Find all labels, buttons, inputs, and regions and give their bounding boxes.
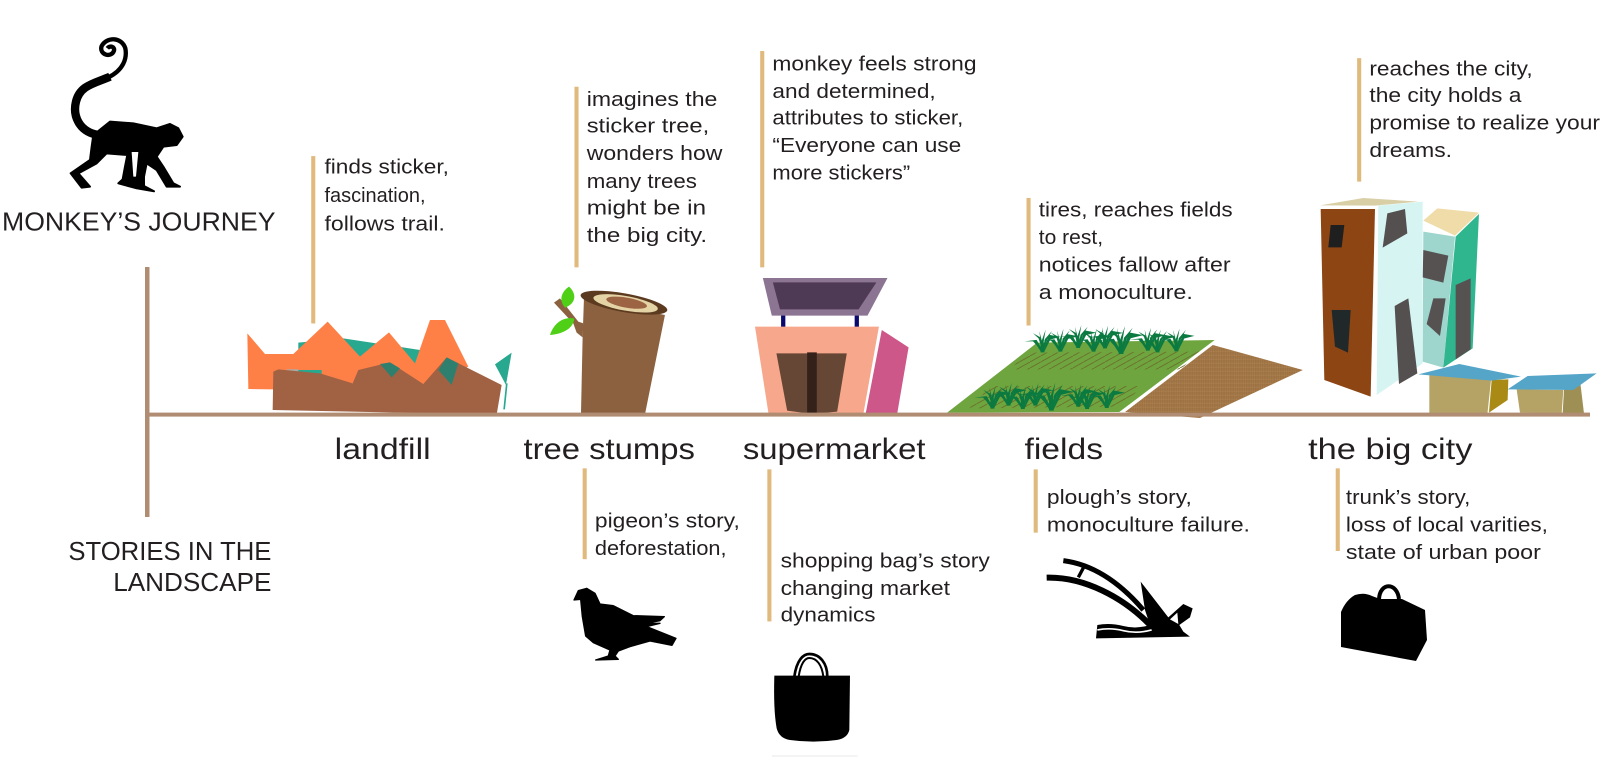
note: finds sticker: fascination, [324,185,426,207]
note: reaches the city: promise to realize your [1369,113,1600,135]
note: tires, reaches fields: to rest, [1039,227,1103,249]
note: monkey feels strong: more stickers” [772,163,910,185]
note: tires, reaches fields [1027,198,1233,326]
note: reaches the city [1357,58,1600,182]
note: trunk's story: trunk’s story, [1346,487,1470,509]
supermarket illustration [755,278,909,417]
heading: monkey's journey: MONKEY’S JOURNEY [2,209,276,237]
note: pigeon's story: deforestation, [595,538,727,560]
icon: trunk suitcase [1341,586,1427,661]
text and marker layer [2,51,1600,626]
icon: monkey [71,39,183,191]
note: pigeon's story: pigeon’s story, [595,511,740,533]
note: pigeon's story [583,468,740,560]
label: fields: fields [1024,433,1103,466]
note: shopping bag's story: shopping bag’s story [781,550,991,572]
note: shopping bag's story: dynamics [781,604,876,626]
heading: stories in the landscape: LANDSCAPE [113,569,271,597]
label: supermarket: supermarket [743,433,926,466]
icon: shopping bag [772,654,858,756]
note: tires, reaches fields: a monoculture. [1039,282,1193,304]
note: monkey feels strong: “Everyone can use [772,135,961,157]
note: tires, reaches fields: tires, reaches fields [1039,199,1233,221]
note: finds sticker: finds sticker, [324,156,449,178]
note: monkey feels strong: attributes to sticker, [772,107,963,129]
icon: plough [1047,561,1193,638]
heading: stories in the landscape [68,538,271,597]
note: imagines the sticker tree: sticker tree, [587,116,709,138]
note: reaches the city: reaches the city, [1369,59,1533,81]
note: plough's story [1034,469,1250,537]
note: imagines the sticker tree [574,87,723,267]
timeline axis [145,267,1590,517]
note: finds sticker [311,156,449,323]
note: monkey feels strong [760,51,977,267]
landfill illustration [247,320,512,415]
note: finds sticker: follows trail. [324,214,445,236]
icon: pigeon [574,588,676,660]
note: plough's story: monoculture failure. [1047,515,1250,537]
note: shopping bag's story: changing market [781,578,950,600]
heading: stories in the landscape: STORIES IN THE [68,538,271,566]
note: shopping bag's story [767,469,991,626]
note: trunk's story [1336,468,1548,564]
label: the big city: the big city [1308,433,1473,466]
note: imagines the sticker tree: the big city. [587,225,707,247]
note: tires, reaches fields: notices fallow after [1039,254,1231,276]
note: imagines the sticker tree: imagines the [587,89,717,111]
small houses illustration [1418,364,1597,415]
note: reaches the city: dreams. [1369,140,1452,162]
big city illustration [1320,198,1479,397]
note: imagines the sticker tree: might be in [587,197,706,219]
note: trunk's story: loss of local varities, [1346,515,1548,537]
label: tree stumps: tree stumps [523,433,695,466]
note: monkey feels strong: monkey feels strong [772,53,977,75]
note: imagines the sticker tree: wonders how [586,143,723,165]
note: imagines the sticker tree: many trees [587,171,697,193]
tree stump illustration [550,286,669,414]
note: plough's story: plough’s story, [1047,487,1192,509]
label: landfill: landfill [335,433,431,466]
note: monkey feels strong: and determined, [772,81,936,103]
fields illustration [947,325,1303,418]
note: reaches the city: the city holds a [1369,85,1522,107]
note: trunk's story: state of urban poor [1346,542,1541,564]
